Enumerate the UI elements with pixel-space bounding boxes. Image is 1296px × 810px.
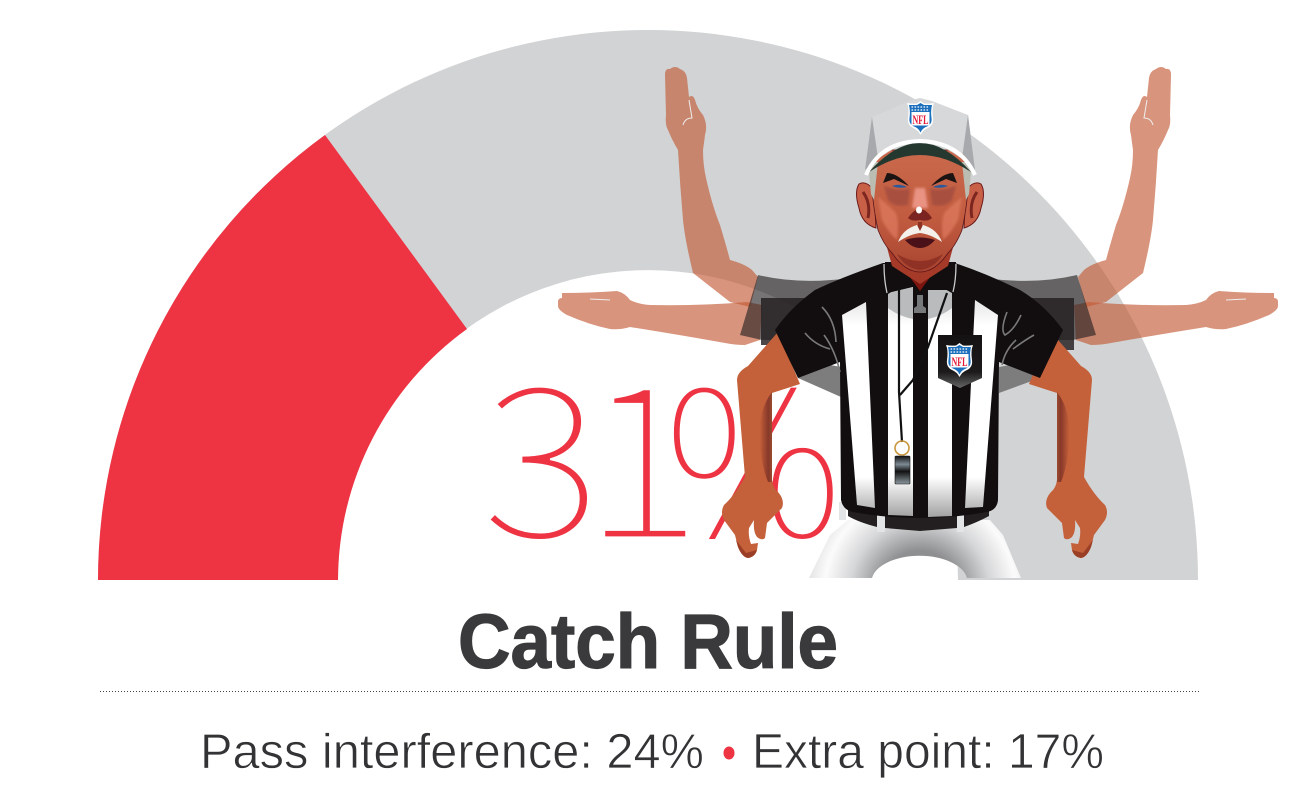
- big number: 31%: 31: [482, 302, 701, 596]
- hair: [868, 162, 972, 200]
- jersey: [775, 258, 1063, 518]
- forearm shadow: [760, 392, 772, 482]
- dotted divider: [100, 690, 1200, 692]
- nose highlight: [916, 206, 922, 214]
- fold lines: [805, 307, 1034, 372]
- mustache: [898, 225, 942, 242]
- hand creases: [590, 100, 1246, 300]
- head: [856, 98, 984, 284]
- yoke shadow: [888, 287, 952, 319]
- fingertip shadow: [1072, 540, 1093, 558]
- chin shadow: [897, 254, 943, 270]
- mouth: [905, 238, 935, 248]
- eyes: [892, 185, 948, 188]
- ghost arm: left horizontal: [558, 291, 762, 345]
- zipper: [914, 295, 926, 313]
- footer stats: [200, 725, 1104, 779]
- face: [871, 150, 969, 272]
- pocket NFL shield: [946, 343, 973, 377]
- forehead and nose bridge: [912, 188, 928, 208]
- hat side panels: [865, 115, 975, 170]
- pocket NFL shield: NFL: [952, 355, 968, 369]
- ghost arm: right horizontal: [1074, 291, 1278, 345]
- collar piping: [884, 264, 956, 293]
- big number: 31%: [482, 302, 843, 596]
- gauge: red 31 percent segment: [98, 135, 467, 580]
- neck: [896, 258, 944, 291]
- eye sockets: [884, 186, 956, 206]
- belt: [848, 507, 989, 531]
- ghost arm: left raised: [665, 67, 758, 307]
- lanyard: [895, 288, 947, 484]
- right arm: [1029, 332, 1107, 558]
- whistle ring: [895, 441, 909, 455]
- stat: extra point: Extra point: 17%: [752, 725, 1104, 779]
- ghost arm: right raised: [1078, 67, 1171, 307]
- collar: [885, 262, 956, 294]
- inner ears: [863, 192, 977, 218]
- hat NFL shield: [907, 101, 934, 135]
- pocket: [938, 335, 982, 388]
- eyebrows: [883, 173, 957, 186]
- ghost sleeves: horizontal: [761, 298, 1074, 350]
- hat crown: [865, 98, 975, 170]
- philtrum: [918, 222, 922, 232]
- whistle: [895, 456, 910, 484]
- bullet: [724, 746, 734, 760]
- visor underside: [869, 143, 971, 172]
- ears: [856, 183, 876, 228]
- ghost sleeves: raised: [740, 270, 1096, 340]
- white stripes: [842, 287, 998, 517]
- gauge: gray remainder: [98, 30, 1198, 580]
- forearm shadow: [1057, 392, 1069, 482]
- neck shadow: [885, 240, 955, 284]
- heading: Catch Rule: Catch Rule: [458, 599, 838, 685]
- big number: 31%: %: [664, 303, 843, 596]
- cheek highlights: [878, 197, 962, 240]
- nose: [908, 210, 932, 221]
- right ear: [964, 183, 984, 228]
- fingertip shadow: [736, 540, 757, 558]
- hat NFL shield: NFL: [912, 113, 928, 127]
- belt loops: [839, 502, 964, 532]
- visor edge: [866, 141, 975, 175]
- armpit shadows: [798, 363, 1040, 397]
- stat: pass interference: Pass interference: 24%: [200, 725, 704, 779]
- pants: [809, 520, 1021, 578]
- left arm: [722, 332, 800, 558]
- referee figure: [558, 67, 1278, 578]
